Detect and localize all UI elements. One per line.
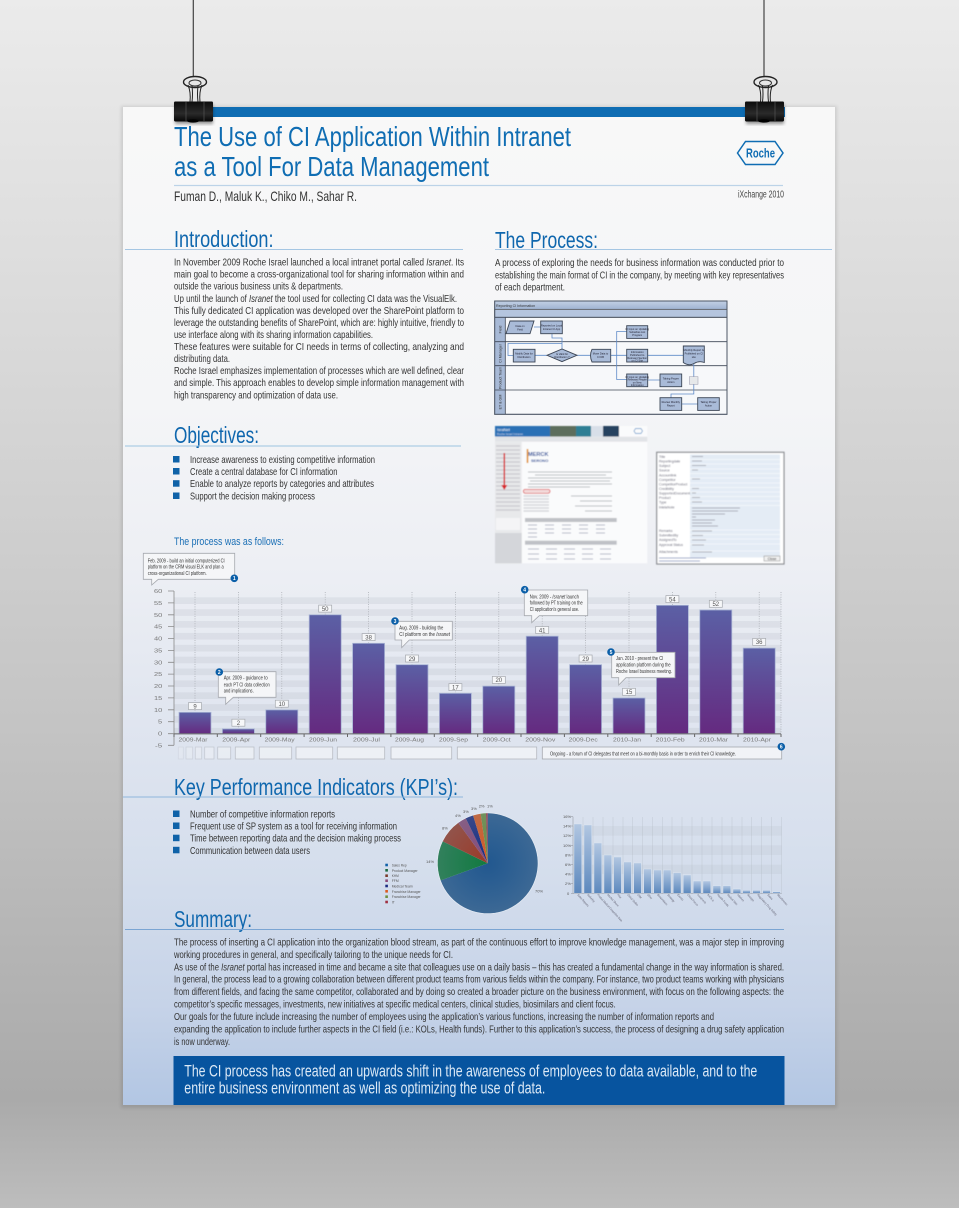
month labels: 2010-Jan [613,737,641,743]
callout 4: Nov 2009 [521,586,588,623]
flow chart: Reporting CI Information [495,301,727,414]
rotated category labels: Regulatory Drug Safety [756,893,778,917]
bar chart: usage share by department: 2% [565,881,571,886]
flow chart: Reporting CI Information: Subsidies List [629,330,645,334]
callout 4: Nov 2009: Nov. 2009 - Isranet launch [530,594,579,600]
rotated category labels: Biosimilars [656,893,669,906]
flow chart: Reporting CI Information: CI DB [597,355,604,359]
conference label: iXchange 2010 [738,190,784,200]
flow chart: Reporting CI Information: on New [633,380,642,384]
y axis: 55 [154,601,162,607]
conclusion banner [174,1056,784,1105]
text block: introduction: outside the various business units & departments. [174,280,343,292]
callout 1: Feb 2009: Feb. 2009 - build an initial computerized CI [148,558,225,564]
screenshot: competitive report detail form: Source [659,469,670,473]
screenshot: competitive report detail form [657,452,784,564]
pie legend: KHM [392,873,399,878]
rotated category labels: Market Share [606,893,620,908]
heading: The Process: The Process: [495,227,598,253]
bar chart: CI reports per month: 9 [193,704,197,710]
bar chart: usage share by department: 0 [567,891,570,896]
callout 5: Jan 2010: 5 [610,650,613,656]
y axis: 25 [154,672,162,678]
bar chart: CI reports per month: 29 [409,657,416,663]
bar chart: usage share by department [563,814,789,923]
text block: introduction: distributing data. [174,353,230,365]
callout 1: Feb 2009: platform on the CRM visual ELK and plan a [148,565,224,571]
bar chart: usage share by department: 4% [565,872,571,876]
y axis: 5 [158,720,162,726]
screenshot: competitive report detail form: Type [659,501,666,505]
screenshot: competitive report detail form: Close [768,557,776,561]
callout 2: Apr 2009: 2 [218,670,221,676]
text block: introduction: use interface along with its sharing information capabilities. [174,329,373,341]
text block: introduction: These features were suitable for CI needs in terms of collecting, analyzing and [174,341,464,353]
pie legend: Sales Rep [392,862,407,868]
text block: introduction: main goal to become a cross-organizational tool for sharing information within and [174,268,464,280]
authors: Fuman D., Maluk K., Chiko M., Sahar R. [174,188,357,204]
month labels: 2009-Sep [439,737,468,743]
pie percentages: 70% [535,888,543,894]
bar chart: usage share by department: 10% [563,843,571,848]
month labels: 2009-Aug [395,737,424,743]
callout 2: Apr 2009: each PT CI data collection [224,682,270,688]
pie legend: Product Manager [392,868,418,873]
rotated category labels: Miscellaneous [776,893,789,906]
bar chart: usage share by department: 8% [565,852,571,858]
list: KPIs: Communication between data users [190,845,310,857]
rotated category labels: Initiatives [736,893,745,903]
rotated category labels: Health Funds [716,893,730,908]
screenshot: competitive report detail form: SubmittedBy [659,534,679,538]
callout 6: ongoing forum [542,743,785,759]
rotated category labels: Other [646,893,653,900]
y axis: 40 [154,636,162,642]
bar chart: CI reports per month: 15 [626,690,633,696]
screenshot: competitive report detail form: SupportedDocument [659,492,690,496]
heading: Introduction: Introduction: [174,226,274,252]
pie chart: users by role [385,804,543,914]
list: KPIs: Time between reporting data and the decision making process [190,833,401,845]
flow chart: Reporting CI Information: Is Valid for [556,352,568,356]
flow chart: Reporting CI Information: Intranet CI App [543,327,561,331]
flow chart: Reporting CI Information: Relevant Section [627,356,648,360]
list: KPIs: Frequent use of SP system as a tool for receiving information [190,820,397,832]
text block: process intro: A process of exploring the needs for business information was conducted prior to [495,257,784,269]
month labels [178,737,771,743]
conclusion banner: entire business environment as well as optimizing the use of data. [184,1079,545,1097]
month labels: 2009-Mar [178,737,208,743]
heading: KPIs: Key Performance Indicators (KPI’s): [174,774,458,800]
y axis: 45 [154,625,162,631]
screenshot: competitive report detail form: Remarks [659,529,673,533]
x axis [174,734,781,737]
y axis: 15 [154,696,162,702]
callout 2: Apr 2009: and implications. [224,689,254,695]
pie percentages: 3% [463,809,469,814]
timeline boxes under the chart [178,747,537,759]
screenshot: Isranet portal page: IsraNet [497,427,511,432]
text block: summary: working procedures in general, and specifically tailoring to the unique needs for CI. [173,949,453,961]
bar chart: usage share by department: 12% [563,833,571,838]
pie percentages: 1% [487,804,493,808]
list: objectives [173,454,375,502]
bar chart: CI reports per month: 36 [756,640,763,646]
bar chart: CI reports per month [154,589,781,749]
text block: process intro: of each department. [495,282,565,294]
top blue bar [190,107,785,117]
pie percentages: 3% [471,806,477,811]
screenshot: competitive report detail form: Accountlink [659,473,677,477]
y axis [154,589,174,749]
pie percentages: 2% [479,804,485,808]
heading: Summary: Summary: [174,906,252,932]
flow chart: Reporting CI Information: CI Input on Updating [625,375,650,379]
callout 3: Aug 2009: 3 [394,619,397,625]
lane labels: Product Team [498,367,502,389]
bar chart: CI reports per month: 38 [365,635,373,641]
icon: right binder clip with hanging wire [745,0,784,124]
screenshot: competitive report detail form: AssignedTo [659,538,677,542]
bar chart: CI reports per month: 41 [539,628,546,634]
rotated category labels: Sales [766,893,774,901]
text block: introduction: leverage the outstanding benefits of SharePoint, which are: highly intuitive, friendly to [174,317,464,329]
y axis: 35 [154,648,162,654]
month labels: 2010-Mar [699,737,728,743]
text block: summary [173,936,784,1048]
flow chart: Reporting CI Information: Published on CI [685,352,703,356]
bar chart: CI reports per month: 20 [495,678,503,684]
bar chart: CI reports per month: 2 [237,721,241,727]
flow chart: Reporting CI Information: Report [667,404,675,408]
flow chart: Reporting CI Information: Information [631,350,644,354]
text block: introduction: Roche Israel emphasizes implementation of processes which are well defined, clear [174,365,464,377]
flow chart: Reporting CI Information: on CI Site [632,358,643,362]
screenshot: Isranet portal page: MERCK [528,452,549,458]
list: objectives: Enable to analyze reports by categories and attributes [190,478,374,490]
screenshot: competitive report detail form: Reportingdate [659,460,680,464]
lane labels: Field [498,326,502,333]
callout 5: Jan 2010: Jan. 2010 - present the CI [616,656,664,662]
text block: summary: is now underway. [174,1036,230,1048]
pie percentages: 4% [455,813,461,818]
screenshot: competitive report detail form: IntelaNote [659,506,675,510]
month labels: 2009-May [265,737,295,743]
flow chart: Reporting CI Information: Reporting CI Information [496,304,535,308]
flow chart: Reporting CI Information: Action [667,380,675,384]
rotated category labels: Clinical Studies [626,893,640,907]
subheading: process timeline: The process was as follows: [174,536,284,548]
lane labels [498,326,502,409]
callout 4: Nov 2009: CI application's general use. [530,607,580,613]
list: objectives: Create a central database for CI information [190,466,338,478]
pie legend [385,862,421,904]
flow chart: Reporting CI Information: Data on [515,324,525,328]
flow chart: Reporting CI Information: Published to [630,353,645,357]
flow arrows [508,327,698,404]
flow chart: Reporting CI Information: Relevant People [628,378,647,382]
pie legend: Medical Team [392,884,413,888]
month labels: 2010-Feb [656,737,685,743]
rotated category labels: Product Medical Competitive Data [596,893,623,923]
month labels: 2009-Nov [525,737,556,743]
pie percentages: 14% [426,859,434,864]
icon: left binder clip with hanging wire [174,0,213,124]
y axis: 0 [158,732,162,738]
text block: introduction: and simple. This approach enables to develop simple information management with [174,377,464,389]
flow chart: Reporting CI Information: Program [632,333,642,337]
rotated category labels: Medical Sites [726,893,739,906]
flow chart: Reporting CI Information: Modify Data for [515,352,533,356]
callout 4: Nov 2009: followed by PT training on the [530,601,583,607]
callout 1: Feb 2009 [143,553,238,585]
month labels: 2009-Apr [222,737,250,743]
callout 5: Jan 2010 [607,648,675,685]
screenshot: competitive report detail form: Subject [659,464,670,468]
bar chart: CI reports per month: 17 [452,685,459,691]
bar chart: CI reports per month: 29 [582,657,590,663]
bar chart: usage share by department: 16% [563,814,571,819]
month labels: 2009-Jun [309,737,337,743]
bar chart: CI reports per month: 52 [712,602,720,608]
callout 4: Nov 2009: 4 [523,588,526,594]
screenshot: Isranet portal page: SERONO [531,458,548,463]
flow chart: Reporting CI Information: Reported on Local [541,324,563,328]
screenshot: competitive report detail form: Title [659,455,665,459]
text block: introduction: Up until the launch of Isranet the tool used for collecting CI data was the VisualElk. [174,293,457,305]
flow chart: Reporting CI Information: Taking Proper [700,400,717,404]
callout 6: ongoing forum: 6 [780,744,783,750]
rotated category labels: Events [676,893,685,902]
list: KPIs: Number of competitive information reports [190,808,335,820]
y axis: 10 [154,708,162,714]
screenshot: competitive report detail form: Attachments [659,550,678,554]
text block: introduction: In November 2009 Roche Israel launched a local intranet portal called Isranet. Its [174,256,464,268]
month labels: 2009-Dec [569,737,598,743]
pie legend: FFM [392,878,399,883]
rotated category labels: Price [616,893,623,900]
icon: Roche logo [738,142,783,164]
screenshot: Isranet portal page: Roche Israel Intranet [497,432,523,436]
pie legend: IT [392,900,395,904]
rotated category labels: Strategy [666,893,676,903]
flow boxes [506,321,534,334]
callout 1: Feb 2009: 1 [233,576,236,582]
bar chart: usage share by department: 14% [563,824,571,828]
bars [179,605,775,734]
callout 5: Jan 2010: Roche Israel business meeting. [616,669,672,675]
flow chart: Reporting CI Information: Action [705,404,713,408]
callout 2: Apr 2009 [216,668,276,704]
y axis: 20 [154,684,162,690]
list: objectives: Increase awareness to existing competitive information [190,454,375,466]
text block: summary: As use of the Isranet portal has increased in time and became a site that colleagues use on a daily basis – this has created a fundamental change in the way information is shared. [174,961,784,973]
bar chart: CI reports per month: 50 [322,607,329,613]
rotated category labels: Client Focus [686,893,700,907]
screenshot: competitive report detail form: Competitor [659,478,676,482]
rotated category labels: KOLs [706,893,716,903]
flow chart: Reporting CI Information: site [692,355,696,359]
y axis: -5 [155,743,162,749]
callout 1: Feb 2009: cross-organizational CI platform. [148,571,207,577]
screenshot: competitive report detail form: CompetitorProduct [659,482,687,486]
month labels: 2009-Jul [353,737,380,743]
lane labels: CI Manager [498,343,502,363]
flow chart: Reporting CI Information: Taking Proper [663,376,679,380]
flow chart: Reporting CI Information: Information [631,383,644,387]
rotated category labels: Investments [696,893,707,905]
lane labels: ET & GM [498,395,502,409]
text block: summary: Our goals for the future include increasing the number of employees using the application’s various functions, increasing the number of information reports and [174,1011,714,1023]
text block: process intro [495,257,784,294]
rotated category labels: CRM [636,893,643,900]
rotated category labels [576,893,789,923]
flow chart: Reporting CI Information: Move Data to [593,352,609,356]
y axis: 60 [154,589,162,595]
callout 3: Aug 2009: CI platform on the Isranet [399,632,450,638]
screenshot: competitive report detail form: Product [659,496,671,500]
rotated category labels: Messages [746,893,755,903]
rotated category labels: Sales Reports [576,893,590,908]
icon: Roche logo: Roche [746,146,775,160]
bar chart: CI reports per month: 10 [278,702,286,708]
pie percentages: 8% [442,826,448,830]
y axis: 50 [154,613,162,619]
flow chart: Reporting CI Information: Field [517,328,523,332]
list: KPIs [173,808,401,857]
list: objectives: Support the decision making process [190,490,315,502]
rotated category labels: Marketing [586,893,596,903]
conclusion banner: The CI process has created an upwards shift in the awareness of employees to data available, and to the [184,1062,757,1080]
pie legend: Franchise Manager [392,889,421,894]
poster sheet [121,106,837,1108]
value labels [188,596,766,726]
screenshot: Isranet portal page [495,426,647,563]
flow chart: Reporting CI Information: Monthly Report Is [684,348,705,352]
text block: introduction: This fully dedicated CI application was developed over the SharePoint platform to [174,305,464,317]
callout 3: Aug 2009: Aug. 2009 - building the [399,626,443,632]
callout 2: Apr 2009: Apr. 2009 - guidance to [224,676,268,682]
pie legend: Franchise Manager [392,894,421,899]
flow chart: Reporting CI Information: Distribution ? [554,355,570,359]
text block: introduction: high transparency and optimization of data use. [174,390,338,402]
bar chart: CI reports per month: 54 [669,597,676,603]
bar chart: usage share by department: 6% [565,862,571,867]
text block: process intro: establishing the main format of CI in the company, by meeting with key representatives [495,270,784,282]
callout 6: ongoing forum: Ongoing - a forum of CI delegates that meet on a bi-monthly basis in order to enrich their CI knowledge. [550,752,736,758]
callout 3: Aug 2009 [391,617,452,648]
screenshot: competitive report detail form: Approval Status [659,543,683,547]
flow chart: Reporting CI Information: Distribution [518,355,531,359]
screenshot: competitive report detail form: Credibility [659,487,674,491]
flow chart: Reporting CI Information: Review Monthly [662,400,681,404]
y axis: 30 [154,660,162,666]
text block: introduction [174,256,464,402]
flow chart: Reporting CI Information: CI Input on Updating [625,327,650,331]
title: as a Tool For Data Management [174,151,489,182]
text block: summary: competitor’s specific messages, investments, new initiatives at specific medical centers, clinical studies, biosimilars and client focus. [174,998,616,1010]
month labels: 2009-Oct [483,737,511,743]
title [174,121,571,182]
callout 5: Jan 2010: application platform during the [616,663,671,669]
heading: Objectives: Objectives: [174,422,259,448]
title: The Use of CI Application Within Intranet [174,121,571,152]
pie percentages [426,804,543,894]
month labels: 2010-Apr [743,737,771,743]
